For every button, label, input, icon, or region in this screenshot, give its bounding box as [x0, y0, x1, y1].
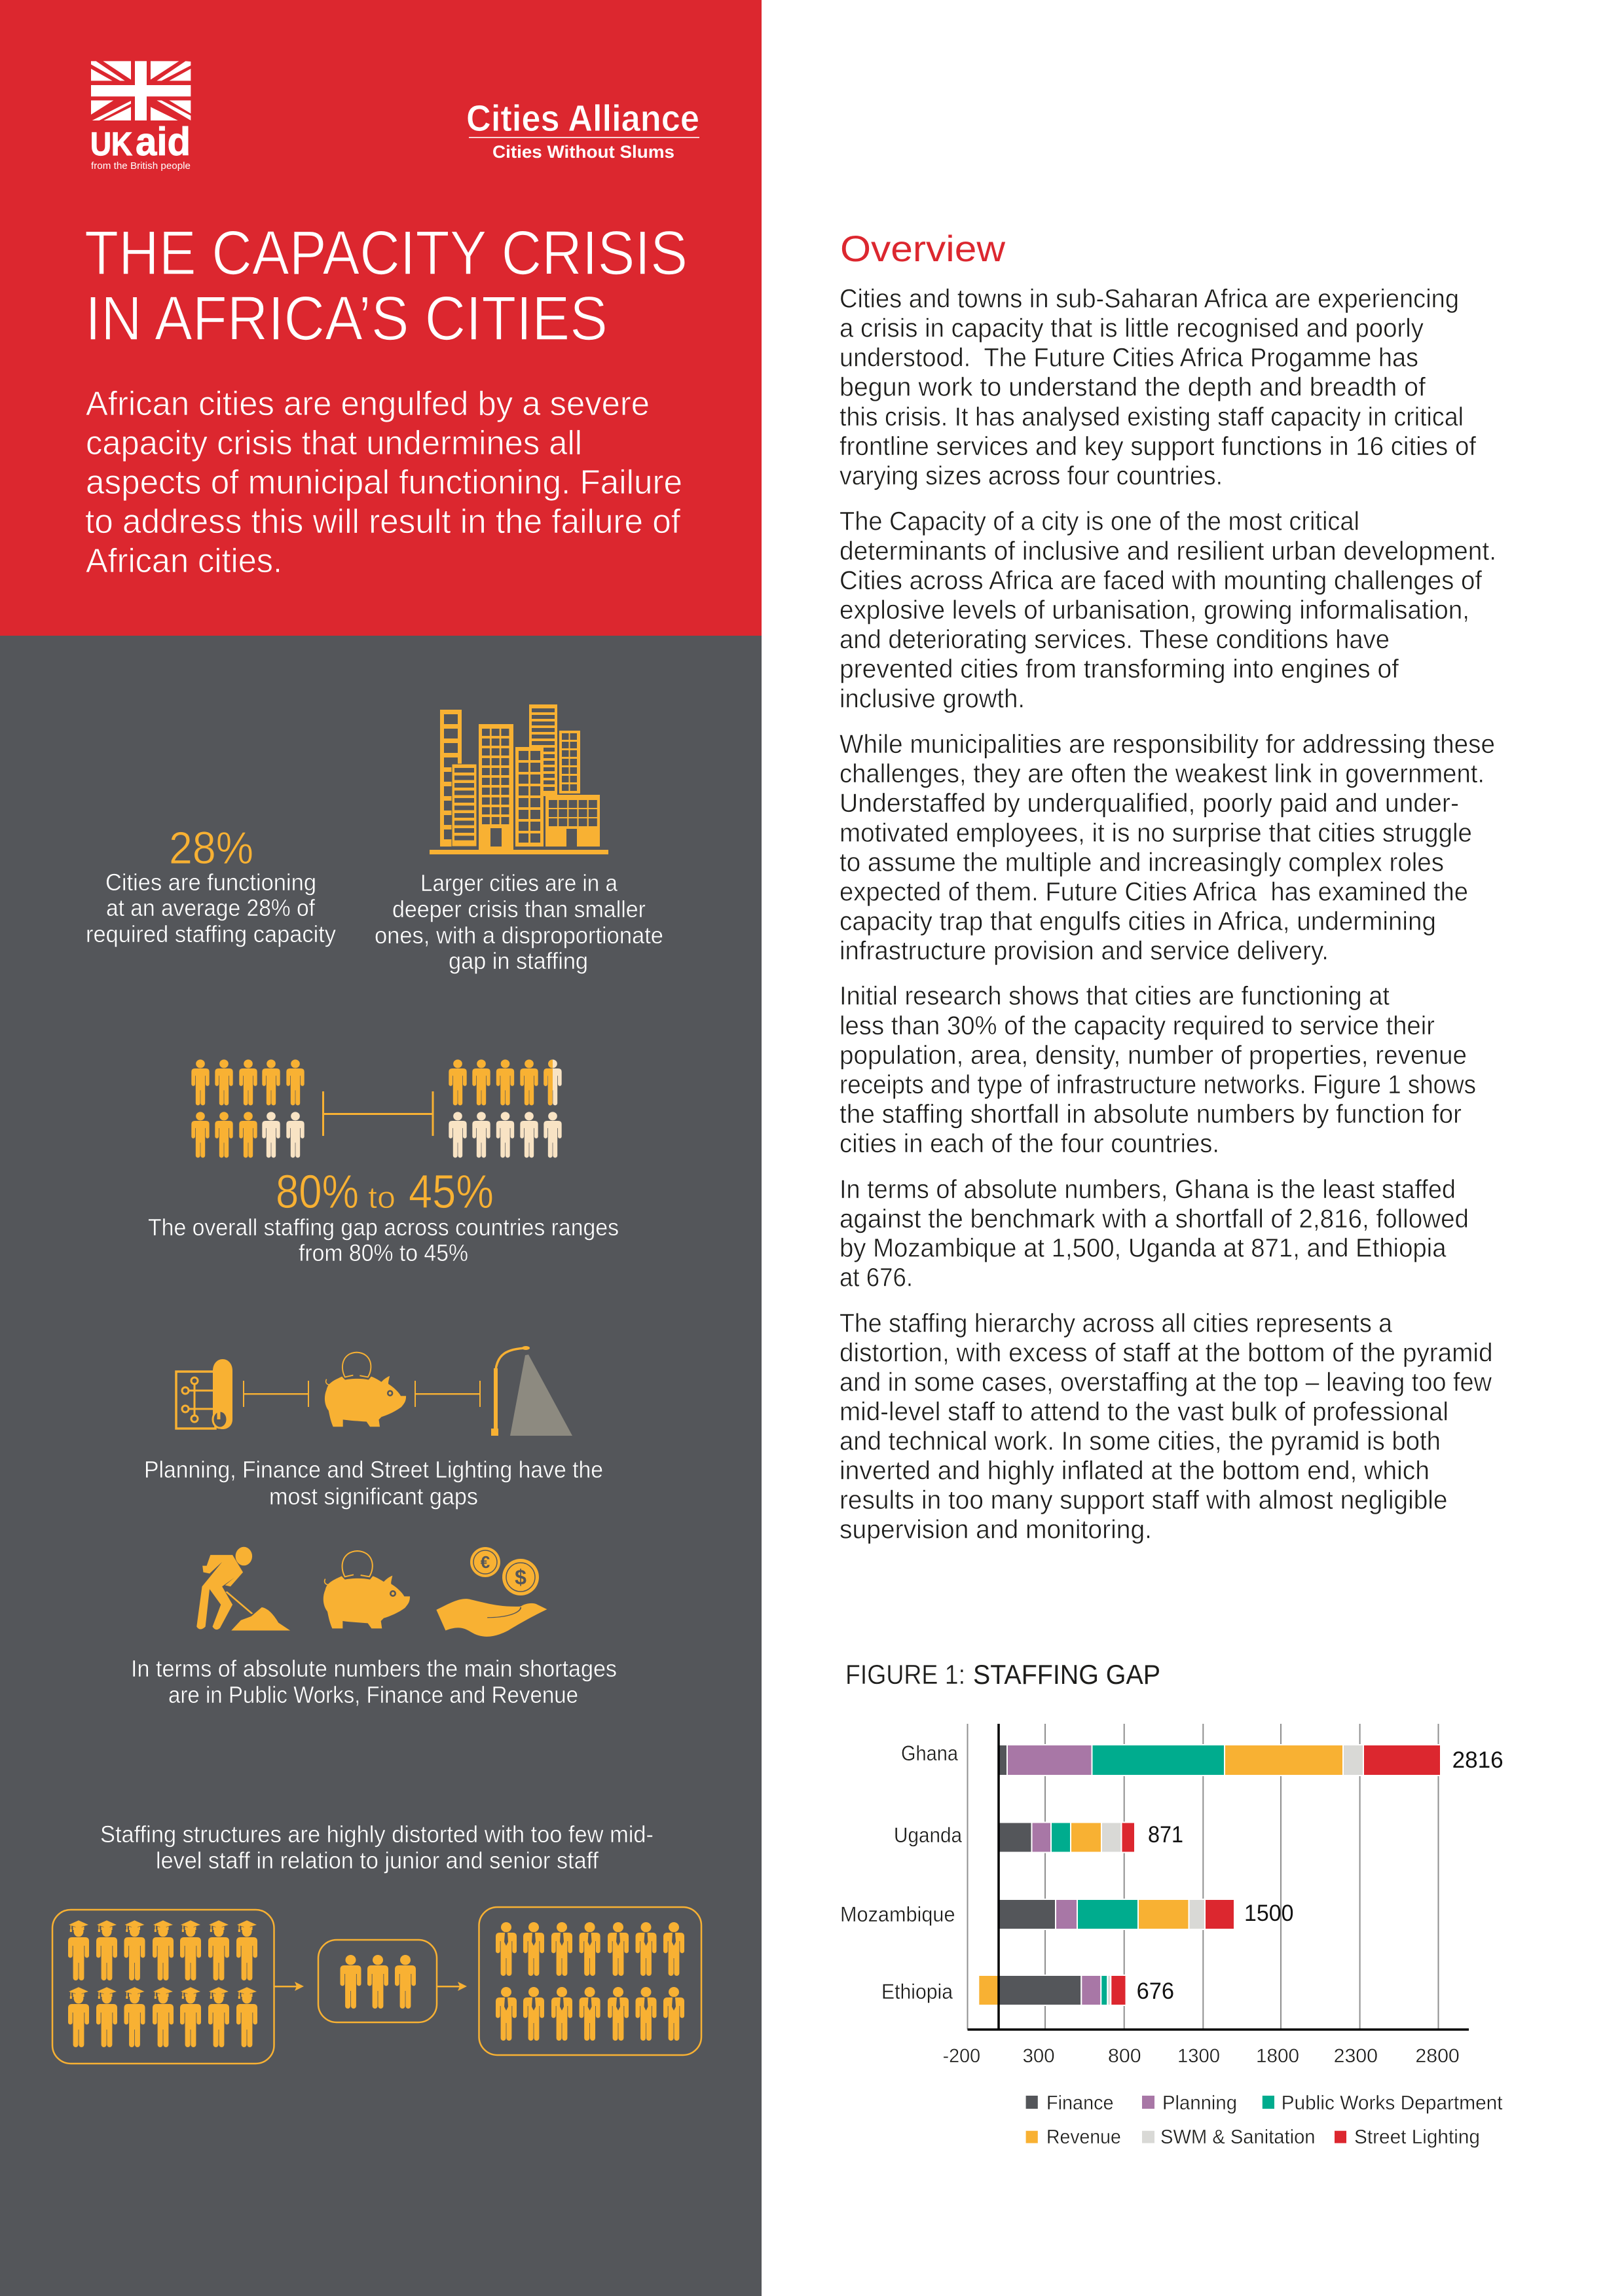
- group: junior staff box: [52, 1910, 274, 2064]
- bar: Ghana: [999, 1745, 1441, 1776]
- legend: Revenue: [1046, 2125, 1121, 2148]
- icon: people 80 percent: [191, 1059, 304, 1157]
- text: paragraph 1: a crisis in capacity that is little recognised and poorly: [840, 314, 1424, 343]
- icon: union flag: [91, 61, 191, 120]
- arrow: junior to mid: [274, 1982, 304, 1991]
- text: paragraph 2: and deteriorating services. These conditions have: [840, 625, 1390, 654]
- title: [84, 218, 688, 354]
- text: paragraph 4: the staffing shortfall in absolute numbers by function for: [840, 1100, 1462, 1129]
- legend: Planning: [1162, 2091, 1237, 2114]
- caption: staffing gap: from 80% to 45%: [299, 1239, 468, 1266]
- text: paragraph 3: challenges, they are often the weakest link in government.: [840, 759, 1485, 788]
- caption: absolute shortages: In terms of absolute numbers the main shortages: [131, 1655, 617, 1682]
- heading: figure 1: [845, 1659, 1160, 1690]
- text: paragraph 6: results in too many support staff with almost negligible: [840, 1485, 1447, 1514]
- text: paragraph 6: distortion, with excess of staff at the bottom of the pyramid: [840, 1339, 1493, 1368]
- text: paragraph 2: [840, 507, 1496, 713]
- logo: UK aid: [90, 61, 191, 172]
- tagline: from the British people: [91, 160, 191, 172]
- text: paragraph 5: by Mozambique at 1,500, Uganda at 871, and Ethiopia: [840, 1234, 1447, 1263]
- icon: hand with coins revenue: $: [515, 1565, 526, 1589]
- text: paragraph 4: receipts and type of infrastructure networks. Figure 1 shows: [840, 1070, 1476, 1099]
- legend: SWM & Sanitation: [1160, 2125, 1315, 2148]
- text: paragraph 3: [840, 730, 1495, 966]
- text: paragraph 2: inclusive growth.: [840, 684, 1025, 713]
- stat: 80% to 45%: to: [368, 1180, 396, 1214]
- connector: finance to street lighting: [415, 1381, 481, 1407]
- arrow: mid to senior: [437, 1982, 467, 1991]
- icon: city buildings: [430, 704, 608, 854]
- caption: larger cities: Larger cities are in a: [420, 869, 618, 896]
- bar totals: 2816: [1452, 1747, 1504, 1773]
- text: paragraph 6: and technical work. In some cities, the pyramid is both: [840, 1427, 1441, 1455]
- number: 28%: [169, 822, 253, 873]
- panel: red header: [0, 0, 762, 636]
- text: paragraph 6: and in some cases, overstaffing at the top – leaving too few: [840, 1368, 1492, 1396]
- stat: 28%: [86, 822, 336, 947]
- text: paragraph 6: [840, 1309, 1493, 1544]
- icon: people 45 percent: [449, 1059, 562, 1157]
- heading: figure 1: FIGURE 1:: [845, 1659, 965, 1690]
- legend: Public Works Department: [1282, 2091, 1503, 2114]
- caption: absolute shortages: [131, 1655, 617, 1708]
- text: paragraph 3: to assume the multiple and increasingly complex roles: [840, 848, 1444, 877]
- text: paragraph 6: inverted and highly inflated at the bottom end, which: [840, 1456, 1430, 1485]
- text: paragraph 2: determinants of inclusive and resilient urban development.: [840, 537, 1496, 566]
- intro text: to address this will result in the failure of: [85, 503, 681, 541]
- axis labels: 2300: [1334, 2045, 1378, 2067]
- axes: [968, 1724, 1469, 2030]
- text: paragraph 3: Understaffed by underqualified, poorly paid and under-: [840, 789, 1459, 818]
- text: paragraph 6: mid-level staff to attend to the vast bulk of professional: [840, 1398, 1449, 1427]
- logo: Cities Alliance: Cities Without Slums: [492, 142, 674, 162]
- bar totals: 676: [1137, 1978, 1174, 2004]
- logo: UK aid: aid: [136, 120, 191, 164]
- stat: 80% to 45%: [276, 1166, 494, 1218]
- country labels: Uganda: [894, 1823, 962, 1847]
- chart: staffing gap stacked bars: [840, 1724, 1504, 2148]
- text: paragraph 4: [840, 982, 1476, 1158]
- text: paragraph 4: cities in each of the four countries.: [840, 1129, 1219, 1158]
- text: paragraph 1: varying sizes across four countries.: [840, 462, 1223, 490]
- axis labels: -200: [943, 2045, 980, 2067]
- heading: overview: Overview: [840, 228, 1006, 269]
- text: paragraph 5: against the benchmark with a shortfall of 2,816, followed: [840, 1205, 1469, 1233]
- text: paragraph 2: prevented cities from transforming into engines of: [840, 655, 1399, 683]
- text: paragraph 5: In terms of absolute numbers, Ghana is the least staffed: [840, 1175, 1456, 1204]
- logo: Cities Alliance: [466, 98, 699, 162]
- icon: worker public works: [196, 1547, 290, 1631]
- connector: people gap: [322, 1091, 434, 1136]
- bar totals: 871: [1148, 1822, 1183, 1848]
- group: mid-level staff box: [318, 1940, 437, 2022]
- text: paragraph 5: [840, 1175, 1469, 1292]
- axis labels: 1800: [1256, 2045, 1299, 2067]
- text: paragraph 1: begun work to understand the depth and breadth of: [840, 373, 1426, 402]
- caption: staffing gap: The overall staffing gap across countries ranges: [148, 1214, 619, 1241]
- axis labels: [943, 2045, 1460, 2067]
- stat: 80% to 45%: 45%: [409, 1166, 494, 1218]
- group: senior staff box: [479, 1907, 701, 2055]
- caption: distorted structures: level staff in relation to junior and senior staff: [156, 1847, 599, 1874]
- icon: hand with coins revenue: [436, 1547, 547, 1637]
- country labels: Ghana: [901, 1741, 958, 1765]
- caption: larger cities: deeper crisis than smaller: [392, 896, 646, 922]
- text: paragraph 4: population, area, density, number of properties, revenue: [840, 1041, 1467, 1070]
- text: paragraph 1: frontline services and key support functions in 16 cities of: [840, 432, 1477, 461]
- text: paragraph 1: understood. The Future Cities Africa Progamme has: [840, 344, 1418, 373]
- icon: hand with coins revenue: €: [481, 1552, 490, 1572]
- legend: Finance: [1046, 2091, 1114, 2114]
- icon: piggy bank finance: [325, 1353, 406, 1427]
- bar: Uganda: [999, 1823, 1135, 1853]
- caption: larger cities: [375, 869, 663, 974]
- intro text: African cities.: [86, 542, 282, 580]
- bar: Mozambique: [999, 1899, 1234, 1929]
- caption: significant gaps: Planning, Finance and Street Lighting have the: [144, 1456, 603, 1483]
- text: paragraph 3: expected of them. Future Cities Africa has examined the: [840, 877, 1468, 906]
- bar totals: 1500: [1244, 1901, 1294, 1926]
- intro text: capacity crisis that undermines all: [86, 424, 582, 462]
- grid lines: [968, 1724, 1438, 2030]
- bar totals: [1137, 1747, 1504, 2004]
- text: paragraph 2: The Capacity of a city is one of the most critical: [840, 507, 1359, 536]
- text: paragraph 1: this crisis. It has analysed existing staff capacity in critical: [840, 403, 1464, 431]
- panel: grey key findings: [0, 636, 762, 2296]
- caption: larger cities: ones, with a disproportionate: [375, 922, 663, 949]
- text: paragraph 4: Initial research shows that cities are functioning at: [840, 982, 1390, 1011]
- icon: planning blueprint: [176, 1359, 232, 1429]
- axis labels: 2800: [1415, 2045, 1460, 2067]
- caption: distorted structures: Staffing structures are highly distorted with too few mid-: [100, 1821, 654, 1848]
- wordmark: UKaid: UK: [90, 126, 132, 162]
- text: paragraph 1: [840, 284, 1477, 490]
- logo: Cities Alliance: Cities Alliance: [466, 98, 699, 139]
- legend: [1026, 2091, 1503, 2148]
- caption: required staffing capacity: [86, 920, 336, 947]
- axis labels: 1300: [1177, 2045, 1220, 2067]
- text: paragraph 1: Cities and towns in sub-Saharan Africa are experiencing: [840, 284, 1459, 313]
- text: paragraph 3: motivated employees, it is no surprise that cities struggle: [840, 818, 1472, 847]
- intro text: aspects of municipal functioning. Failure: [86, 464, 682, 501]
- caption: Cities are functioning: [105, 869, 316, 896]
- text: paragraph 6: The staffing hierarchy across all cities represents a: [840, 1309, 1393, 1338]
- text: paragraph 3: While municipalities are responsibility for addressing these: [840, 730, 1495, 759]
- title: THE CAPACITY CRISIS: [84, 218, 688, 288]
- text: paragraph 3: infrastructure provision and service delivery.: [840, 937, 1329, 966]
- country labels: Mozambique: [840, 1903, 955, 1926]
- text: paragraph 3: capacity trap that engulfs cities in Africa, undermining: [840, 907, 1436, 936]
- caption: significant gaps: [144, 1456, 603, 1510]
- text: paragraph 2: explosive levels of urbanisation, growing informalisation,: [840, 596, 1469, 625]
- caption: at an average 28% of: [106, 894, 316, 921]
- bar: Ethiopia: [978, 1975, 1126, 2005]
- caption: absolute shortages: are in Public Works, Finance and Revenue: [168, 1681, 578, 1708]
- stat: 80% to 45%: 80%: [276, 1166, 359, 1218]
- legend: Street Lighting: [1354, 2125, 1480, 2148]
- text: paragraph 4: less than 30% of the capacity required to service their: [840, 1011, 1435, 1040]
- intro text: [85, 385, 682, 580]
- caption: staffing gap: [148, 1214, 619, 1266]
- text: paragraph 6: supervision and monitoring.: [840, 1515, 1152, 1544]
- caption: [86, 869, 336, 947]
- text: paragraph 2: Cities across Africa are faced with mounting challenges of: [840, 566, 1483, 595]
- connector: planning to finance: [243, 1381, 309, 1407]
- axis labels: 800: [1108, 2045, 1141, 2067]
- country labels: Ethiopia: [881, 1980, 953, 2003]
- caption: larger cities: gap in staffing: [449, 947, 588, 974]
- axis labels: 300: [1023, 2045, 1055, 2067]
- heading: figure 1: STAFFING GAP: [973, 1659, 1160, 1690]
- country labels: [840, 1741, 962, 2003]
- text: paragraph 5: at 676.: [840, 1264, 913, 1292]
- intro text: African cities are engulfed by a severe: [86, 385, 650, 423]
- icon: street light: [491, 1346, 572, 1436]
- title: IN AFRICA’S CITIES: [85, 283, 608, 354]
- caption: significant gaps: most significant gaps: [269, 1483, 478, 1510]
- icon: piggy bank finance 2: [323, 1551, 410, 1628]
- caption: distorted structures: [100, 1821, 654, 1874]
